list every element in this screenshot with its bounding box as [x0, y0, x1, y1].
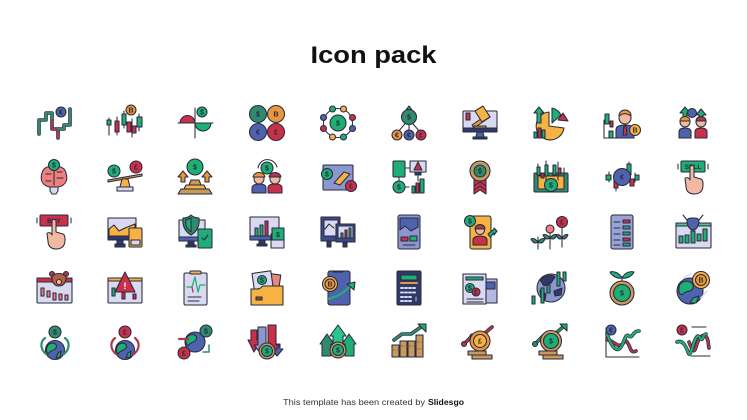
icon: calculator	[397, 271, 421, 305]
icon: globe with dollar and cycle arrows	[41, 326, 69, 360]
icon: coin hierarchy: €	[407, 132, 411, 140]
icon: phone with bitcoin and rising arrow	[322, 271, 355, 305]
icon: globe with exchange coins: $	[204, 328, 208, 336]
icon: stepped price lines with euro coin	[39, 107, 70, 138]
icon: trader with candles and bitcoin	[604, 110, 640, 138]
icon: green coin with stack and line: $	[549, 338, 553, 346]
icon: coin hierarchy: €	[395, 132, 399, 140]
icon: balance scale with coins: £	[134, 164, 138, 172]
icon: two monitors with charts	[321, 217, 355, 247]
icon: coin medal with sprout: $	[620, 290, 624, 298]
icon: sell button with hand	[678, 161, 708, 194]
icon: falling arrows with coin: $	[265, 348, 269, 356]
icon: green coin with stack and line	[532, 324, 567, 359]
icon: globe with pound and cycle arrows: £	[123, 330, 127, 336]
icon: euro coin with candles	[606, 162, 639, 191]
icon: monitor with gavel	[463, 106, 497, 139]
icon: growing plants with coin	[531, 216, 568, 249]
icon: phone, monitor, coin and bars flow	[393, 161, 426, 193]
icon: candlesticks with bitcoin	[107, 105, 142, 137]
footer credit: This template has been created by	[283, 397, 426, 407]
icon: coin hierarchy: $	[407, 114, 411, 122]
icon: zigzag lines chart with pound	[677, 325, 710, 356]
icon: monitor and tablet with chart	[108, 218, 142, 247]
icon: candlesticks with bitcoin: B	[128, 108, 134, 114]
icon: wavy lines chart with euro: €	[609, 328, 613, 334]
icon: coin hierarchy	[392, 106, 426, 140]
icon: coin network	[320, 106, 356, 140]
icon: four currency coins: €	[256, 130, 260, 136]
icon: four currency coins	[250, 106, 284, 140]
icon: folder with banknotes	[251, 271, 283, 305]
icon: pie chart with arrow and warning	[534, 107, 568, 140]
icon: orange coin with falling stack and line	[462, 327, 492, 359]
icon: phone with map and buttons	[398, 215, 420, 249]
icon: trader with candles and bitcoin: B	[632, 128, 638, 134]
icon: globe with dollar and cycle arrows: $	[53, 330, 57, 336]
icon: two people with coin cycle: $	[265, 166, 269, 172]
icon: rising arrows with coin	[320, 325, 356, 358]
icon: growing plants with coin: £	[560, 220, 564, 226]
icon: falling arrows with coin	[248, 325, 283, 359]
icon: wave chart with dollar coin	[178, 107, 213, 138]
icon: four currency coins: B	[273, 112, 279, 118]
icon: four currency coins: $	[256, 112, 260, 118]
title: Icon pack	[310, 42, 437, 69]
icon: coin medal with sprout	[610, 272, 634, 305]
icon: map with currency coins: £	[349, 184, 353, 190]
icon: newspaper with currencies: £	[474, 290, 478, 296]
icon: newspaper with currencies: $	[468, 286, 472, 292]
icon: map with currency coins: $	[325, 172, 329, 178]
icon: stepped price lines with euro coin: €	[59, 110, 63, 116]
icon: clipboard with pulse chart	[184, 271, 207, 305]
icon: orange coin with falling stack and line: £	[478, 338, 482, 346]
icon: globe with bitcoin	[677, 272, 710, 304]
icon: buy button with hand: BUY	[47, 218, 62, 225]
icon: folder with banknotes: $	[260, 278, 264, 284]
icon: phone with adviser and coin: $	[468, 218, 472, 226]
icon: phone with adviser and coin	[464, 216, 497, 249]
icon: banknote with candles	[534, 161, 568, 192]
icon: globe with pound and cycle arrows	[111, 326, 139, 360]
icon: banknote with candles: $	[549, 182, 553, 190]
icon: browser with warning triangle: !	[124, 281, 126, 291]
icon: two people with coin cycle	[252, 160, 282, 193]
icon: globe with exchange coins	[178, 325, 212, 359]
icon: zigzag lines chart with pound: £	[680, 328, 684, 334]
icon: globe with candles	[532, 272, 566, 304]
icon: two people with growth arrows	[679, 107, 707, 138]
icon: monitor with bars and phone	[250, 217, 284, 248]
icon: globe with exchange coins: £	[182, 350, 186, 358]
icon: ribbon medal	[470, 161, 490, 194]
icon: globe with bitcoin: B	[698, 278, 704, 284]
icon: brain with coin: $	[52, 162, 56, 170]
icon: ribbon medal: $	[478, 168, 482, 176]
icon: coin stacks with rising arrow	[392, 324, 426, 357]
icon: monitor with bars and phone: $	[276, 232, 280, 239]
icon: browser with bull and candles	[676, 215, 711, 248]
icon: browser with warning triangle	[108, 272, 142, 303]
icon: monitor with shield and phone	[179, 215, 212, 248]
icon: balance scale with coins: $	[112, 168, 116, 176]
icon: sell button with hand: SELL	[685, 164, 701, 171]
icon: phone with order list	[611, 215, 633, 249]
icon: map with currency coins	[322, 165, 356, 192]
icon: phone with bitcoin and rising arrow: B	[327, 282, 333, 288]
icon: wavy lines chart with euro	[606, 325, 639, 357]
icon: wave chart with dollar coin: $	[200, 110, 204, 116]
icon: balance scale with coins	[108, 161, 142, 191]
icon: gold bars with coin and arrows: $	[193, 164, 197, 172]
icon: phone, monitor, coin and bars flow: $	[397, 184, 401, 192]
icon: rising arrows with coin: $	[336, 348, 340, 354]
icon: coin network: $	[336, 120, 340, 128]
icon grid	[37, 105, 711, 360]
icon: brain with coin	[41, 160, 67, 194]
icon: browser with bear and candles	[37, 272, 72, 303]
icon: euro coin with candles: €	[620, 174, 624, 182]
icon: coin hierarchy: £	[419, 132, 423, 140]
icon: four currency coins: £	[274, 130, 278, 136]
footer credit: Slidesgo	[428, 397, 464, 407]
icon: newspaper with currencies	[463, 274, 497, 304]
icon: buy button with hand	[37, 215, 71, 249]
icon: gold bars with coin and arrows	[178, 159, 212, 194]
